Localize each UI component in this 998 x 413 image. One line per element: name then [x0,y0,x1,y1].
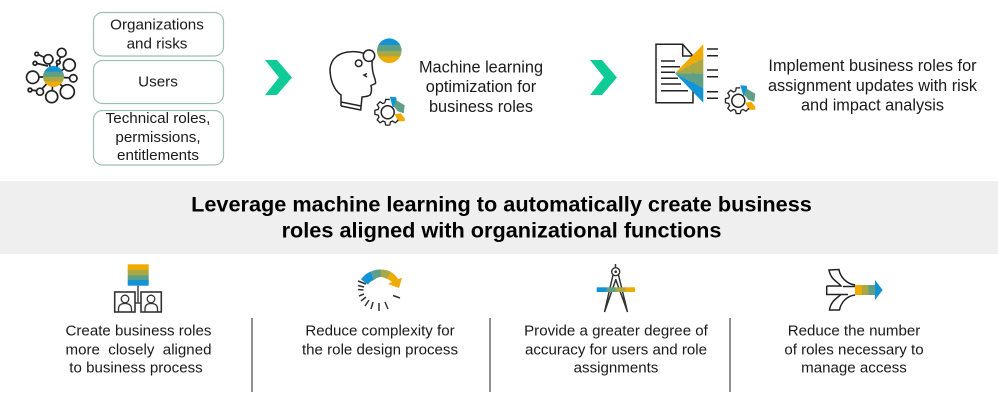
text: implement business roles: Implement business roles for [768,57,977,75]
text: machine learning optimization [419,58,543,116]
input box: technical roles: Technical roles, [106,110,210,127]
arrow: second chevron [590,60,617,95]
icon: document with prism and gear [656,44,755,114]
input box: users: Users [138,74,178,90]
icon: gear [375,97,405,125]
text: benefit 3 [524,322,709,376]
icon: business role hierarchy [115,264,161,312]
text: machine learning optimization: Machine learning [419,58,543,76]
text: machine learning optimization: business roles [429,98,533,116]
text: benefit 3: Provide a greater degree of [524,322,709,340]
text: benefit 4 [784,322,924,376]
text: benefit 4: Reduce the number [788,322,920,340]
text: benefit 1 [66,322,211,376]
icon: gear [725,85,755,114]
icon: merging arrow [827,270,883,310]
title: Leverage machine learning to automatically create business [191,192,812,216]
text: benefit 3: assignments [574,360,658,376]
input box: technical roles: permissions, [115,129,201,146]
text: benefit 1: to business process [69,360,203,376]
input box: technical roles [94,110,224,165]
divider [489,318,491,392]
text: benefit 4: of roles necessary to [784,342,924,358]
input box: users [94,60,224,104]
text: implement business roles [768,57,978,114]
arrow: first chevron [265,60,292,95]
input box: organizations and risks: Organizations [110,16,204,34]
input box: organizations and risks [94,12,224,56]
text: benefit 2: the role design process [302,342,458,358]
title: roles aligned with organizational functions [282,218,721,242]
icon: data network [26,48,77,103]
divider [729,318,731,392]
icon: complexity arc [358,269,402,311]
text: benefit 4: manage access [801,360,907,376]
band: headline [0,181,998,254]
title [191,192,812,242]
icon: compass [597,264,635,312]
text: implement business roles: and impact analysis [801,96,944,114]
input box: technical roles: entitlements [117,147,199,164]
text: benefit 2: Reduce complexity for [305,322,455,340]
icon: head with gear [330,38,405,125]
text: benefit 1: more closely aligned [66,342,211,358]
text: benefit 1: Create business roles [66,322,211,340]
input box: organizations and risks: and risks [127,36,188,52]
text: benefit 3: accuracy for users and role [525,342,707,358]
divider [251,318,253,392]
text: implement business roles: assignment updates with risk [768,77,978,95]
text: benefit 2 [302,322,458,358]
text: machine learning optimization: optimization for [426,78,537,96]
